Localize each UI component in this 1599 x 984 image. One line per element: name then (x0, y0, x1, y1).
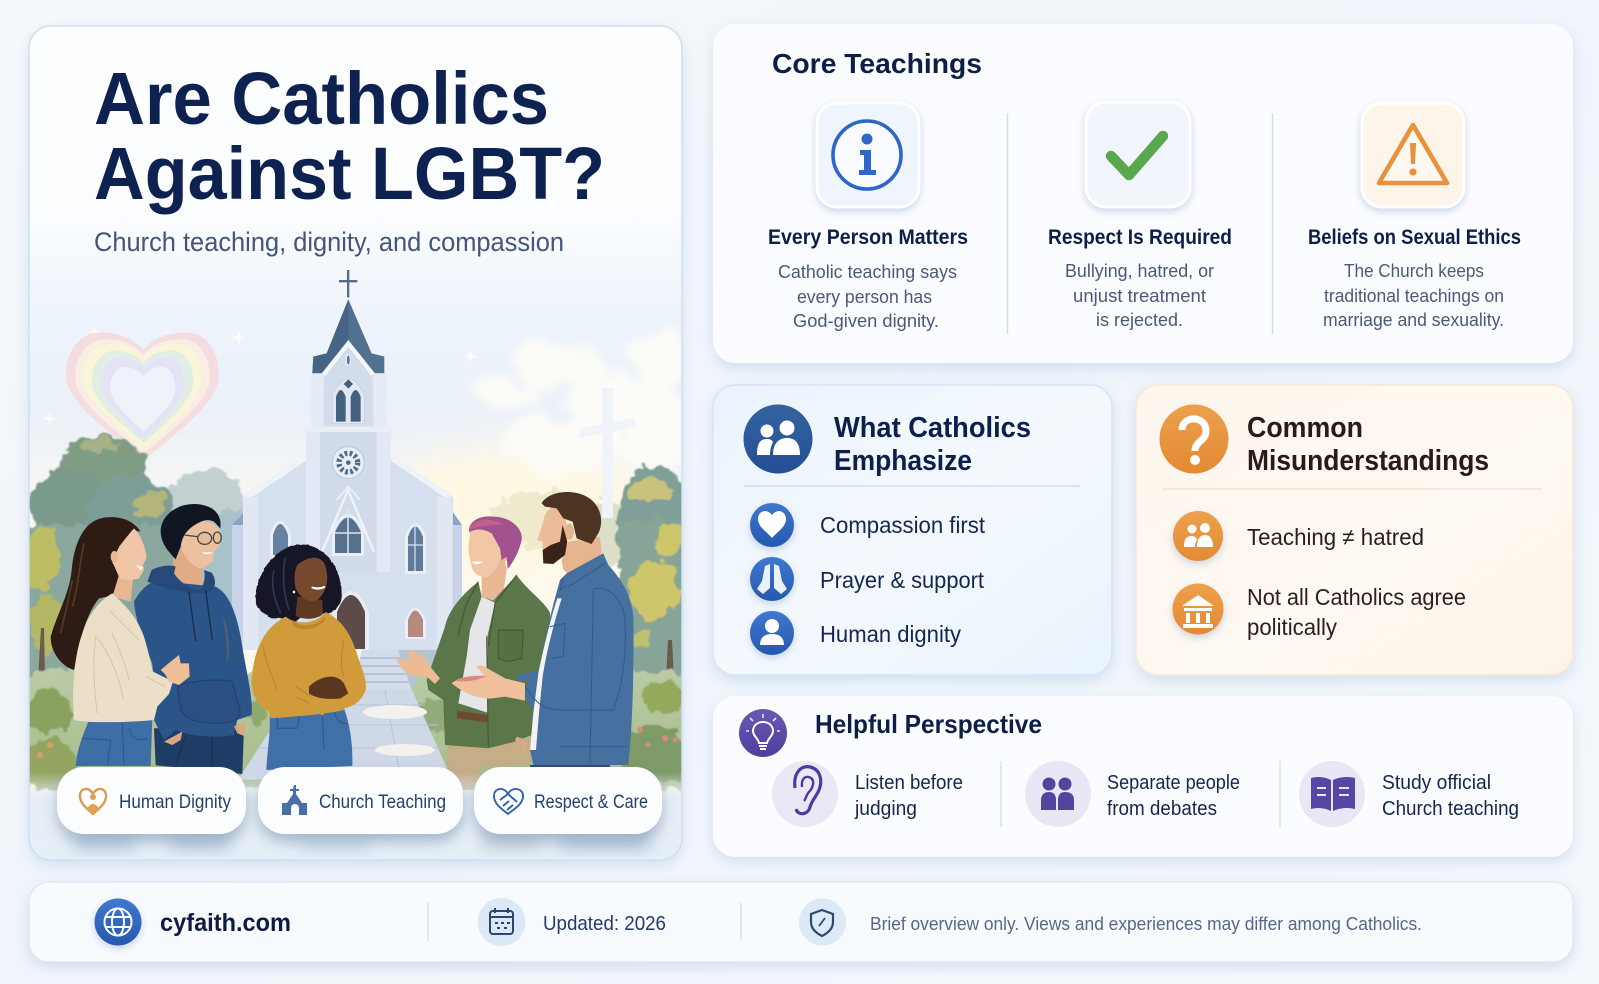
updated date: Updated: 2026 (543, 913, 666, 935)
item: separate people from debates (1025, 761, 1240, 827)
panel: hero (10, 26, 700, 860)
website: cyfaith.com (160, 909, 291, 937)
item: separate people from debates: from debates (1107, 797, 1217, 820)
panel: helpful perspective (713, 696, 1573, 857)
church building (232, 270, 462, 650)
nave (243, 456, 453, 650)
item: separate people from debates: Separate people (1107, 771, 1240, 794)
pill: respect and care (474, 767, 662, 834)
column: respect is required: Bullying, hatred, or (1065, 260, 1214, 281)
icon: praying hands (750, 557, 794, 601)
icon: ear (772, 761, 838, 827)
icon: light bulb (739, 709, 787, 757)
door (333, 591, 369, 650)
icon: handshake heart (494, 789, 523, 814)
icon: book (1299, 761, 1365, 827)
column: respect is required (1048, 102, 1232, 330)
item: prayer and support: Prayer & support (820, 567, 984, 593)
pill: respect and care: Respect & Care (534, 791, 648, 813)
icon: shield (799, 898, 846, 946)
item: listen before judging: judging (854, 797, 917, 820)
disclaimer: Brief overview only. Views and experiences may differ among Catholics. (870, 913, 1422, 934)
column: every person matters: Catholic teaching says (778, 261, 957, 282)
side door (405, 608, 426, 639)
item: study official church teaching: Church teaching (1382, 797, 1519, 820)
portal gable (322, 490, 374, 552)
icon: heart with person (80, 789, 106, 814)
heading: Emphasize (834, 445, 972, 477)
icon: church (282, 785, 307, 815)
icon: institution (1172, 584, 1224, 634)
item: study official church teaching (1299, 761, 1519, 827)
icon: two people (1025, 761, 1091, 827)
icon: calendar (478, 898, 526, 946)
heading: Common (1247, 412, 1363, 444)
column: beliefs on sexual ethics: traditional teachings on (1324, 285, 1504, 306)
column: every person matters (768, 103, 968, 331)
item: teaching is not hatred: Teaching ≠ hatred (1247, 524, 1424, 550)
column: beliefs on sexual ethics: marriage and sexuality. (1323, 309, 1504, 330)
item: compassion first: Compassion first (820, 512, 985, 538)
icon: question (1160, 404, 1228, 474)
heading (1247, 412, 1489, 477)
illustration: church and friends (30, 270, 682, 860)
heading: Core Teachings (772, 48, 982, 79)
person: cream sweater (51, 517, 190, 766)
subtitle: Church teaching, dignity, and compassion (94, 227, 564, 257)
person: mustard sweater (252, 545, 366, 770)
item: human dignity: Human dignity (820, 621, 961, 647)
stairs and path (238, 650, 450, 780)
heading: Misunderstandings (1247, 445, 1489, 477)
windows (332, 514, 364, 556)
panel: core teachings (713, 24, 1573, 363)
column: beliefs on sexual ethics: The Church keeps (1344, 260, 1484, 281)
person: denim shirt (452, 492, 634, 770)
item: human dignity (750, 611, 961, 655)
item: not all catholics agree: Not all Catholics agree (1247, 584, 1466, 610)
column: every person matters: every person has (797, 286, 932, 307)
column: respect is required: is rejected. (1096, 309, 1183, 330)
item: not all catholics agree (1172, 584, 1466, 640)
item: prayer and support (750, 557, 984, 601)
heading (834, 412, 1031, 477)
rainbow heart (66, 332, 219, 460)
person: hoodie (134, 504, 252, 774)
panel: what catholics emphasize (713, 385, 1112, 675)
roadside cross (579, 388, 636, 518)
column: beliefs on sexual ethics: Beliefs on Sexual Ethics (1308, 225, 1521, 249)
item: not all catholics agree: politically (1247, 614, 1337, 640)
footer bar (29, 882, 1573, 962)
pill: human dignity (57, 767, 246, 834)
column: beliefs on sexual ethics (1308, 103, 1521, 330)
pill: church teaching: Church Teaching (319, 791, 446, 813)
heading: What Catholics (834, 412, 1031, 444)
icon: warning (1362, 103, 1464, 207)
item: teaching is not hatred (1173, 511, 1424, 561)
ground (10, 672, 700, 787)
column: every person matters: Every Person Matters (768, 225, 968, 249)
heading: Helpful Perspective (815, 709, 1042, 739)
panel: common misunderstandings (1136, 385, 1573, 675)
pill: church teaching (258, 767, 463, 834)
column: every person matters: God-given dignity. (793, 310, 939, 331)
pill: human dignity: Human Dignity (119, 791, 231, 813)
tower and spire (303, 270, 393, 572)
aisles (232, 525, 462, 650)
icon: globe (94, 898, 142, 946)
background trees (30, 432, 682, 678)
sparkles (43, 326, 477, 425)
icon: people (1173, 511, 1223, 561)
item: study official church teaching: Study official (1382, 771, 1491, 794)
title: Against LGBT? (94, 132, 605, 215)
item: compassion first (750, 503, 985, 547)
icon: info (817, 103, 919, 207)
person: green jacket (396, 516, 550, 790)
title: Are Catholics (94, 57, 549, 140)
icon: person (750, 611, 794, 655)
title (94, 57, 605, 215)
bottom fade (29, 772, 682, 860)
icon: check (1086, 102, 1190, 207)
sky glow and clouds (43, 326, 700, 570)
item: listen before judging (772, 761, 963, 827)
icon: heart (750, 503, 794, 547)
column: respect is required: unjust treatment (1073, 285, 1206, 306)
item: listen before judging: Listen before (855, 771, 963, 794)
column: respect is required: Respect Is Required (1048, 225, 1232, 249)
icon: people (744, 404, 812, 474)
